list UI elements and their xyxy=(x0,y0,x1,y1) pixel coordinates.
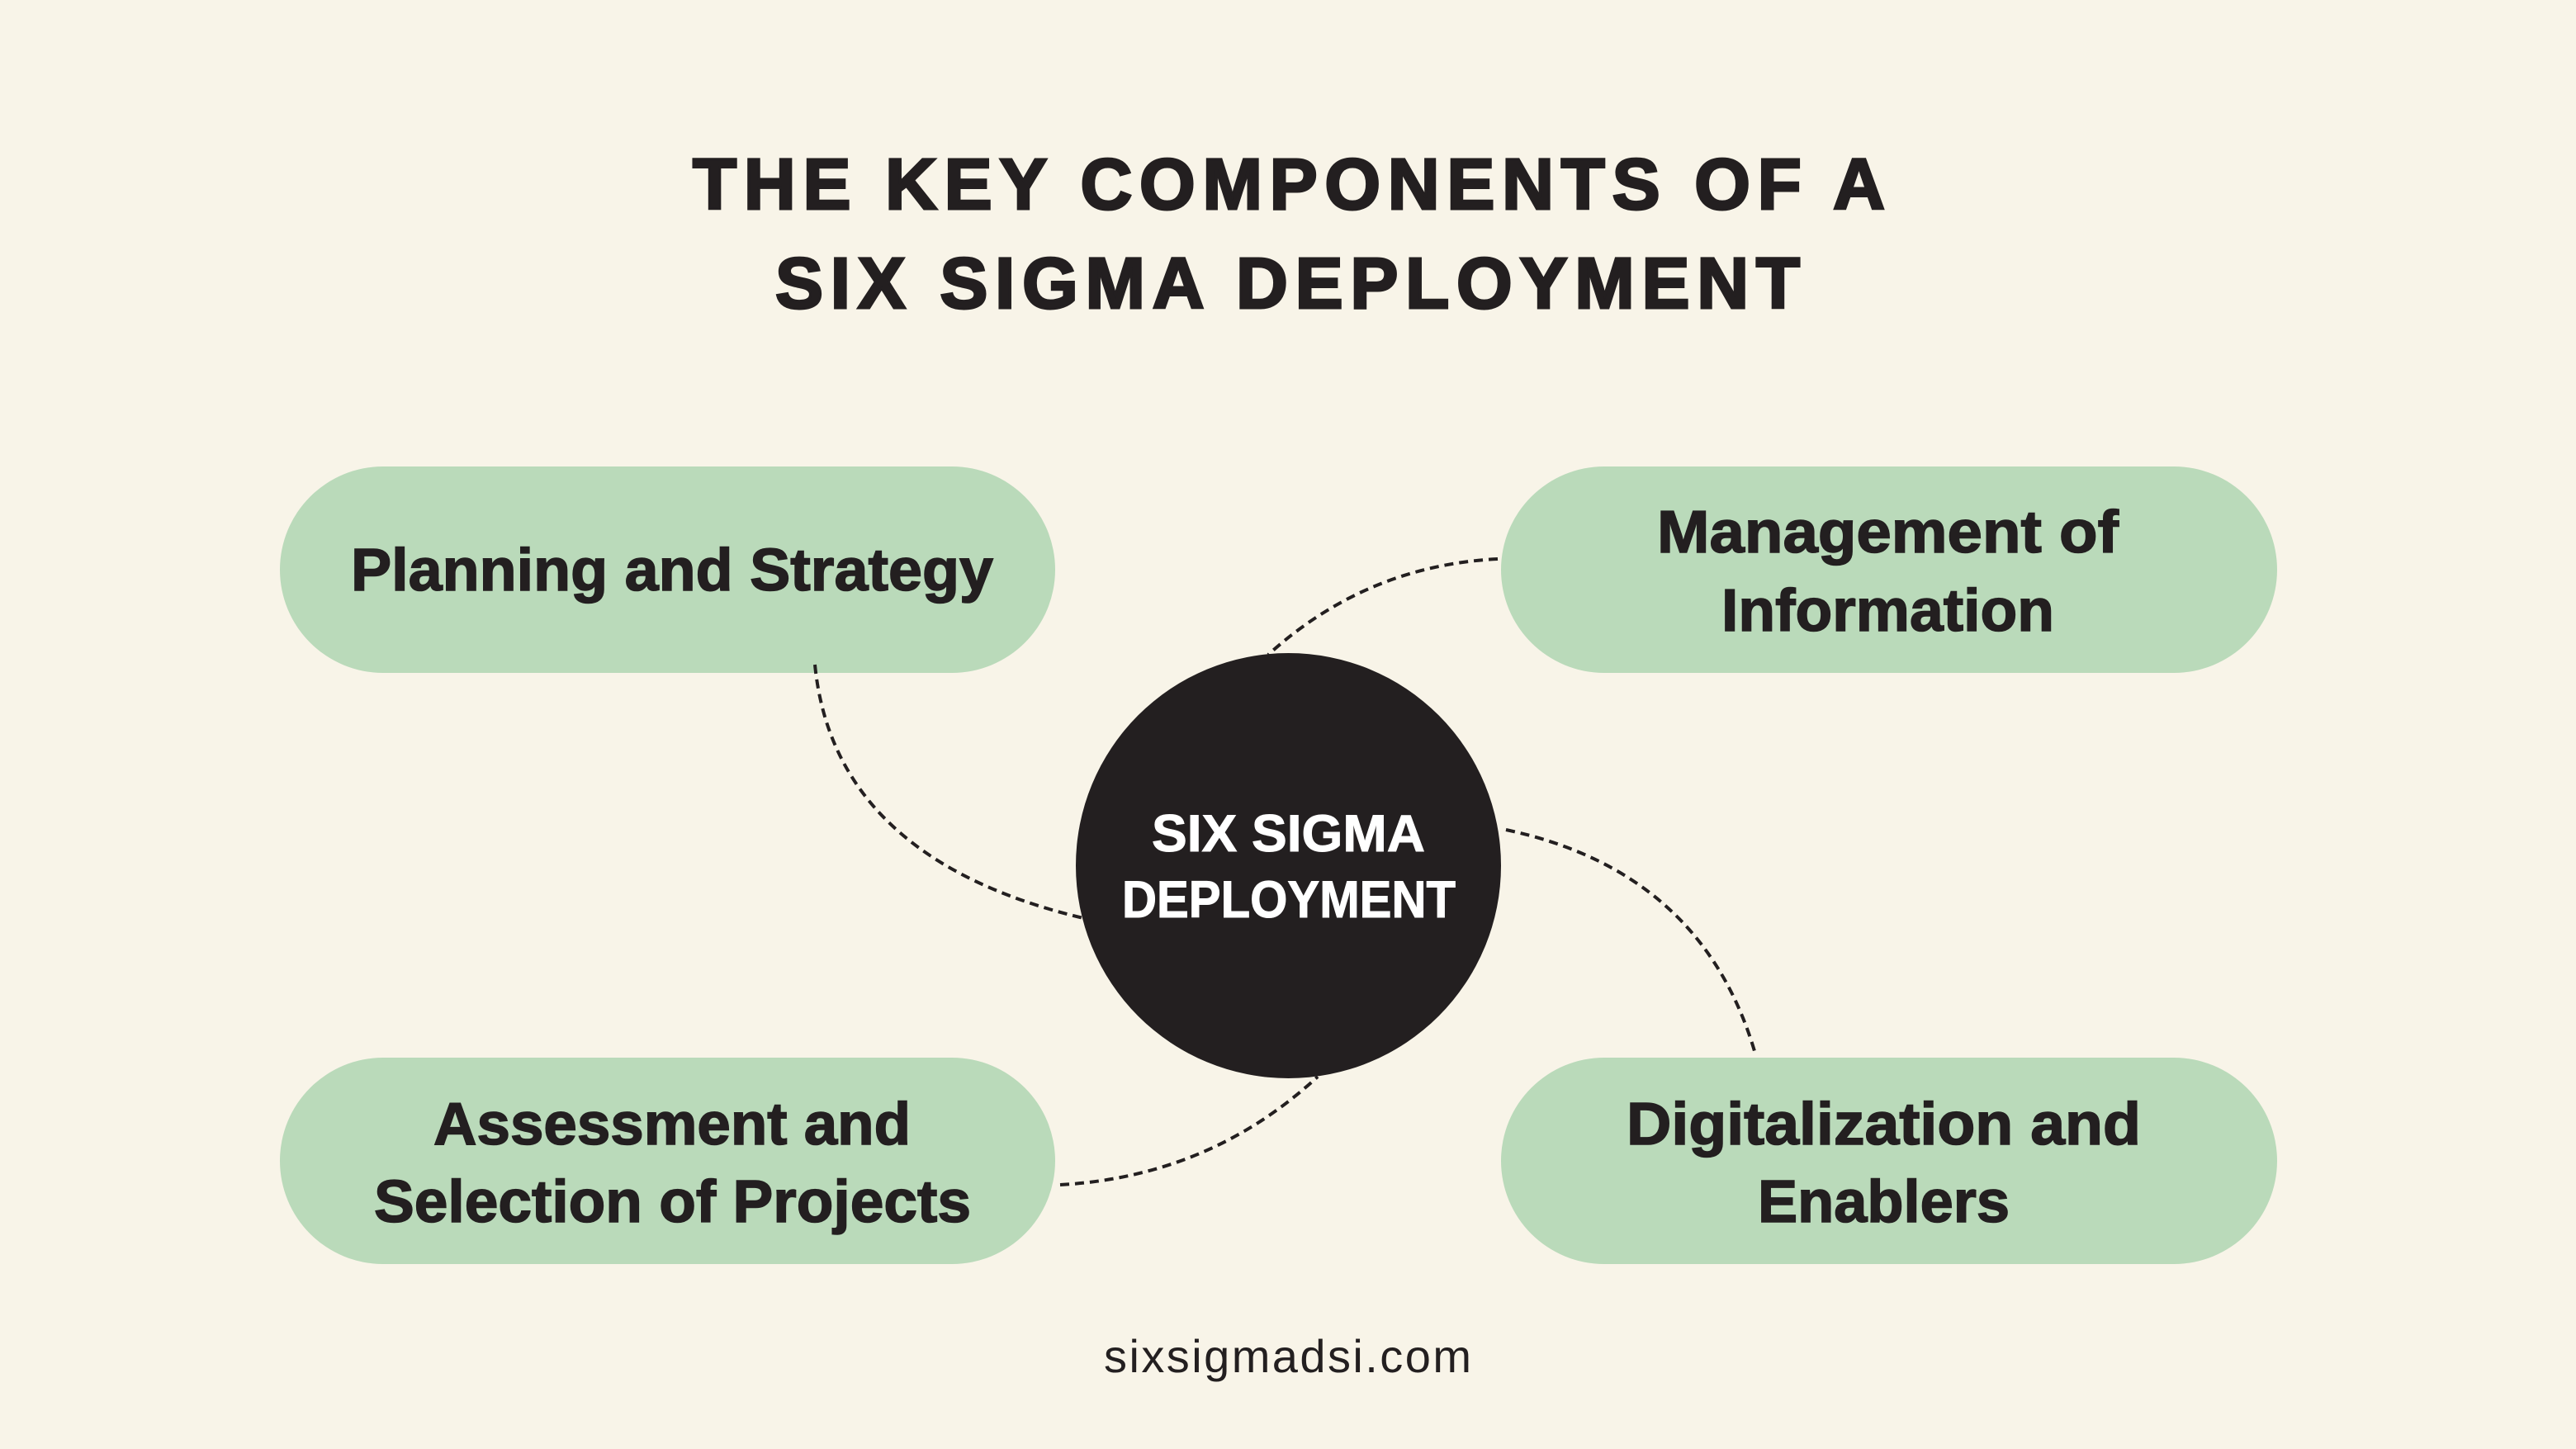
arrow: centre to Assessment and Selection of Projects xyxy=(1060,1077,1318,1185)
title xyxy=(693,144,1885,324)
panel: Assessment and Selection of Projects xyxy=(280,1058,1055,1264)
arrow: centre to Digitalization and Enablers xyxy=(1506,830,1754,1051)
panel: Management of Information: Management of xyxy=(1657,500,2119,566)
title: THE KEY COMPONENTS OF A xyxy=(693,144,1885,225)
panel: Digitalization and Enablers xyxy=(1501,1058,2277,1264)
panel: Digitalization and Enablers: Digitalization and xyxy=(1627,1091,2141,1158)
centre circle: Six Sigma Deployment: SIX SIGMA xyxy=(1152,805,1425,863)
panel: Assessment and Selection of Projects: Selection of Projects xyxy=(374,1169,971,1235)
panel: Digitalization and Enablers: Enablers xyxy=(1758,1169,2010,1235)
panel: Management of Information: Information xyxy=(1721,578,2054,644)
panel: Planning and Strategy: Planning and Strategy xyxy=(351,537,993,604)
arrow: centre to Management of Information xyxy=(1268,559,1498,655)
title: SIX SIGMA DEPLOYMENT xyxy=(775,244,1800,324)
panel: Planning and Strategy xyxy=(280,466,1055,673)
centre circle: Six Sigma Deployment xyxy=(1076,653,1501,1078)
arrow: Planning and Strategy to centre xyxy=(815,665,1083,918)
footer website: sixsigmadsi.com xyxy=(1104,1330,1471,1382)
panel: Management of Information xyxy=(1501,466,2277,673)
panel: Assessment and Selection of Projects: Assessment and xyxy=(433,1091,911,1158)
centre circle: Six Sigma Deployment: DEPLOYMENT xyxy=(1122,871,1456,929)
